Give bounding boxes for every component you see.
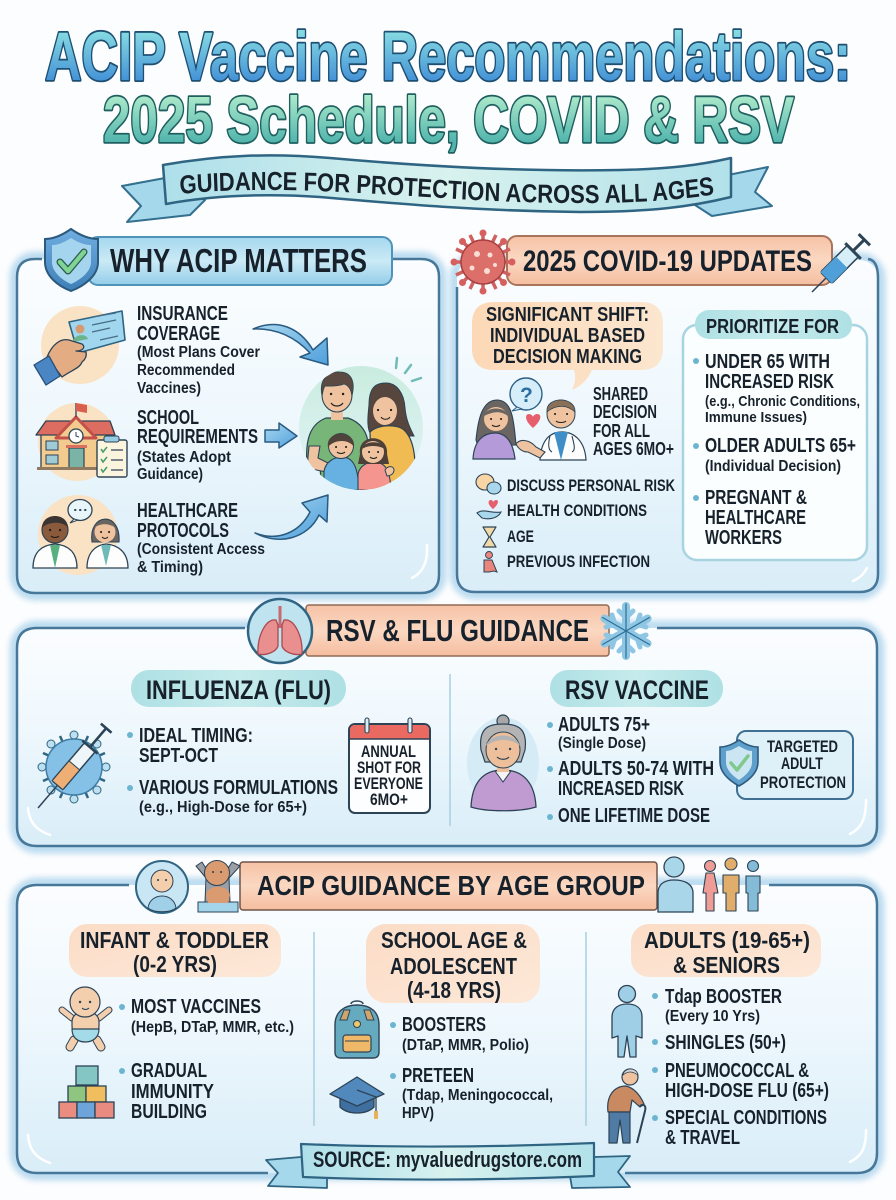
list: infant vaccines: BUILDING [131,1101,207,1123]
list: RSV guidance: ADULTS 75+ [558,714,650,736]
list: infant vaccines: (HepB, DTaP, MMR, etc.) [131,1019,294,1036]
list: infant vaccines [119,996,294,1123]
list: adult vaccines: Tdap BOOSTER [665,986,782,1008]
list: influenza guidance: VARIOUS FORMULATIONS [139,777,338,799]
icon: adult figure [612,986,642,1057]
heading: 2025 COVID-19 updates: 2025 COVID-19 UPDATES [523,245,812,278]
heading: school age and adolescent: ADOLESCENT [390,953,517,979]
text: insurance coverage: Vaccines) [137,380,201,397]
subtitle ribbon: GUIDANCE FOR PROTECTION ACROSS ALL AGES [180,172,714,204]
list: adult vaccines: & TRAVEL [665,1127,740,1149]
list: adult vaccines: (Every 10 Yrs) [665,1008,760,1025]
heading: ACIP guidance by age group: ACIP GUIDANCE BY AGE GROUP [257,870,645,901]
subtitle ribbon [121,154,773,223]
list: adult vaccines: SPECIAL CONDITIONS [665,1107,827,1129]
text: insurance coverage: INSURANCE [137,303,228,325]
heading: infant and toddler [69,924,281,977]
icon: lungs person [484,552,497,572]
icon: building blocks [59,1066,114,1118]
father [307,418,368,490]
icon: annual shot calendar: EVERYONE [354,774,423,793]
text: healthcare protocols: HEALTHCARE [137,500,238,522]
list: infant vaccines: IMMUNITY [131,1081,215,1103]
icon: patient and doctor conversation [473,378,586,460]
text: discussion list [507,477,675,571]
text: discussion list: AGE [507,528,534,546]
callout: targeted adult protection: TARGETED [767,738,838,756]
icon: annual shot calendar: 6MO+ [370,790,408,809]
icon: older woman [467,715,539,811]
icon: annual shot calendar: ANNUAL [361,742,416,761]
text: insurance coverage [137,303,260,397]
icon: hourglass [483,527,496,547]
list: influenza guidance: IDEAL TIMING: [139,725,253,747]
list: RSV guidance: ONE LIFETIME DOSE [558,805,710,827]
icon: healthcare workers [33,495,128,575]
icon: insurance card in hand [34,306,125,385]
icon: senior with cane [608,1069,645,1143]
heading: ACIP guidance by age group [240,862,657,910]
text: healthcare protocols: PROTOCOLS [137,520,229,542]
list: RSV guidance [547,714,714,827]
callout: targeted adult protection: PROTECTION [760,774,846,792]
list: adult vaccines: PNEUMOCOCCAL & [665,1060,809,1082]
heading: influenza: INFLUENZA (FLU) [146,675,331,705]
icon: baby [62,987,109,1047]
list: influenza guidance: SEPT-OCT [139,745,218,767]
list: infant vaccines: MOST VACCINES [131,996,261,1018]
icon: heart in hand [477,500,501,519]
icon: flu virus and syringe [30,722,114,814]
source ribbon [266,1143,630,1188]
list: priority groups: HEALTHCARE [705,507,806,529]
callout: significant shift: INDIVIDUAL BASED [490,325,645,347]
list: priority groups: INCREASED RISK [705,371,834,393]
text: shared decision: SHARED [593,384,648,404]
heading: prioritize for [695,310,852,339]
text: school requirements: Guidance) [137,466,203,483]
heading: school age and adolescent [366,924,540,1003]
panel: ACIP guidance by age group [15,857,879,1175]
text: insurance coverage: Recommended [137,362,235,379]
text: discussion list: DISCUSS PERSONAL RISK [507,477,675,495]
text: shared decision: AGES 6MO+ [593,439,674,459]
list: priority groups: UNDER 65 WITH [705,351,830,373]
heading: adults and seniors: & SENIORS [673,952,780,978]
text: healthcare protocols: & Timing) [137,559,203,576]
list: priority groups: WORKERS [705,527,782,549]
panel: prioritize for [683,310,867,560]
heading: adults and seniors: ADULTS (19-65+) [644,927,810,953]
arrow: school to family [265,423,297,448]
list: priority groups: Immune Issues) [705,409,807,426]
list: school age vaccines: HPV) [402,1105,434,1122]
mother hair and top [368,383,414,436]
daughter [358,462,391,490]
heading: prioritize for: PRIORITIZE FOR [706,316,839,338]
icon: annual shot calendar [349,718,430,813]
icon: patient and doctor conversation: ? [520,384,533,407]
text: insurance coverage: COVERAGE [137,323,220,345]
list: RSV guidance: (Single Dose) [558,735,646,752]
icon: discussion bubble [476,474,501,494]
icon: toddler [196,860,240,912]
list: influenza guidance: (e.g., High-Dose for 65+) [139,799,307,816]
text: school requirements: REQUIREMENTS [137,426,258,448]
icon: backpack [335,1001,379,1058]
icon: coronavirus [450,230,516,294]
heading: adults and seniors [631,924,821,978]
panel: 2025 COVID-19 updates [450,230,880,594]
column: adults and seniors [608,924,829,1149]
panel: RSV and flu guidance [15,599,879,848]
column: infant and toddler [59,924,294,1123]
list: adult vaccines: SHINGLES (50+) [665,1032,786,1054]
panel: why ACIP matters [15,229,441,595]
text: healthcare protocols [137,500,265,576]
heading: school age and adolescent: SCHOOL AGE & [381,927,527,953]
callout: significant shift: SIGNIFICANT SHIFT: [486,304,649,326]
icon: snowflake [603,604,649,658]
column: school age and adolescent [330,924,553,1122]
list: RSV guidance: ADULTS 50-74 WITH [558,758,714,780]
heading: school age and adolescent: (4-18 YRS) [407,977,501,1003]
list: RSV guidance: INCREASED RISK [558,778,684,800]
list: adult vaccines: HIGH-DOSE FLU (65+) [665,1080,829,1102]
icon: family [299,358,423,490]
text: shared decision: DECISION [593,402,657,422]
icon: adult and family figures [658,857,760,912]
list: school age vaccines: PRETEEN [402,1065,474,1087]
text: discussion list: HEALTH CONDITIONS [507,502,647,520]
text: insurance coverage: (Most Plans Cover [137,344,260,361]
list: adult vaccines [652,986,829,1149]
source ribbon: SOURCE: myvaluedrugstore.com [313,1147,582,1172]
heading: infant and toddler: INFANT & TODDLER [80,927,269,953]
icon: school and checklist [36,403,127,481]
callout: significant shift [472,302,663,390]
list: priority groups: PREGNANT & [705,487,807,509]
list: priority groups [693,351,860,549]
arrow: healthcare to family [255,495,328,539]
title [45,18,851,156]
list: school age vaccines [390,1014,553,1122]
heading: why ACIP matters [88,237,392,285]
text: healthcare protocols: (Consistent Access [137,541,265,558]
icon: swaddled baby [136,861,188,913]
text: school requirements: (States Adopt [137,449,232,466]
list: infant vaccines: GRADUAL [131,1060,207,1082]
arrow: insurance to family [253,325,328,365]
list: school age vaccines: BOOSTERS [402,1014,486,1036]
icon: annual shot calendar: SHOT FOR [357,758,421,777]
list: priority groups: (Individual Decision) [705,458,841,475]
heading: infant and toddler: (0-2 YRS) [133,951,217,977]
son [324,457,359,490]
heading: why ACIP matters: WHY ACIP MATTERS [110,242,367,279]
list: school age vaccines: (Tdap, Meningococcal, [402,1087,553,1104]
icon: shield with check [45,229,98,291]
heading: RSV vaccine [550,670,723,707]
text: school requirements: SCHOOL [137,407,199,429]
text: school requirements [137,407,258,483]
callout: targeted adult protection: ADULT [781,755,823,773]
heading: RSV and flu guidance [306,605,609,656]
heading: 2025 COVID-19 updates [507,236,832,285]
text: shared decision [593,384,674,459]
icon: lungs [248,599,312,663]
list: priority groups: OLDER ADULTS 65+ [705,435,856,457]
heading: RSV and flu guidance: RSV & FLU GUIDANCE [326,613,589,648]
callout: targeted adult protection [720,731,853,799]
icon: syringe [804,232,872,300]
heading: RSV vaccine: RSV VACCINE [565,675,709,705]
list: influenza guidance [127,725,338,816]
list: priority groups: (e.g., Chronic Conditions, [705,393,860,410]
callout: significant shift: DECISION MAKING [493,346,642,368]
text: discussion list: PREVIOUS INFECTION [507,553,650,571]
icon: graduation cap [330,1077,384,1119]
heading: influenza [131,670,346,707]
list: school age vaccines: (DTaP, MMR, Polio) [402,1037,529,1054]
text: shared decision: FOR ALL [593,421,650,441]
